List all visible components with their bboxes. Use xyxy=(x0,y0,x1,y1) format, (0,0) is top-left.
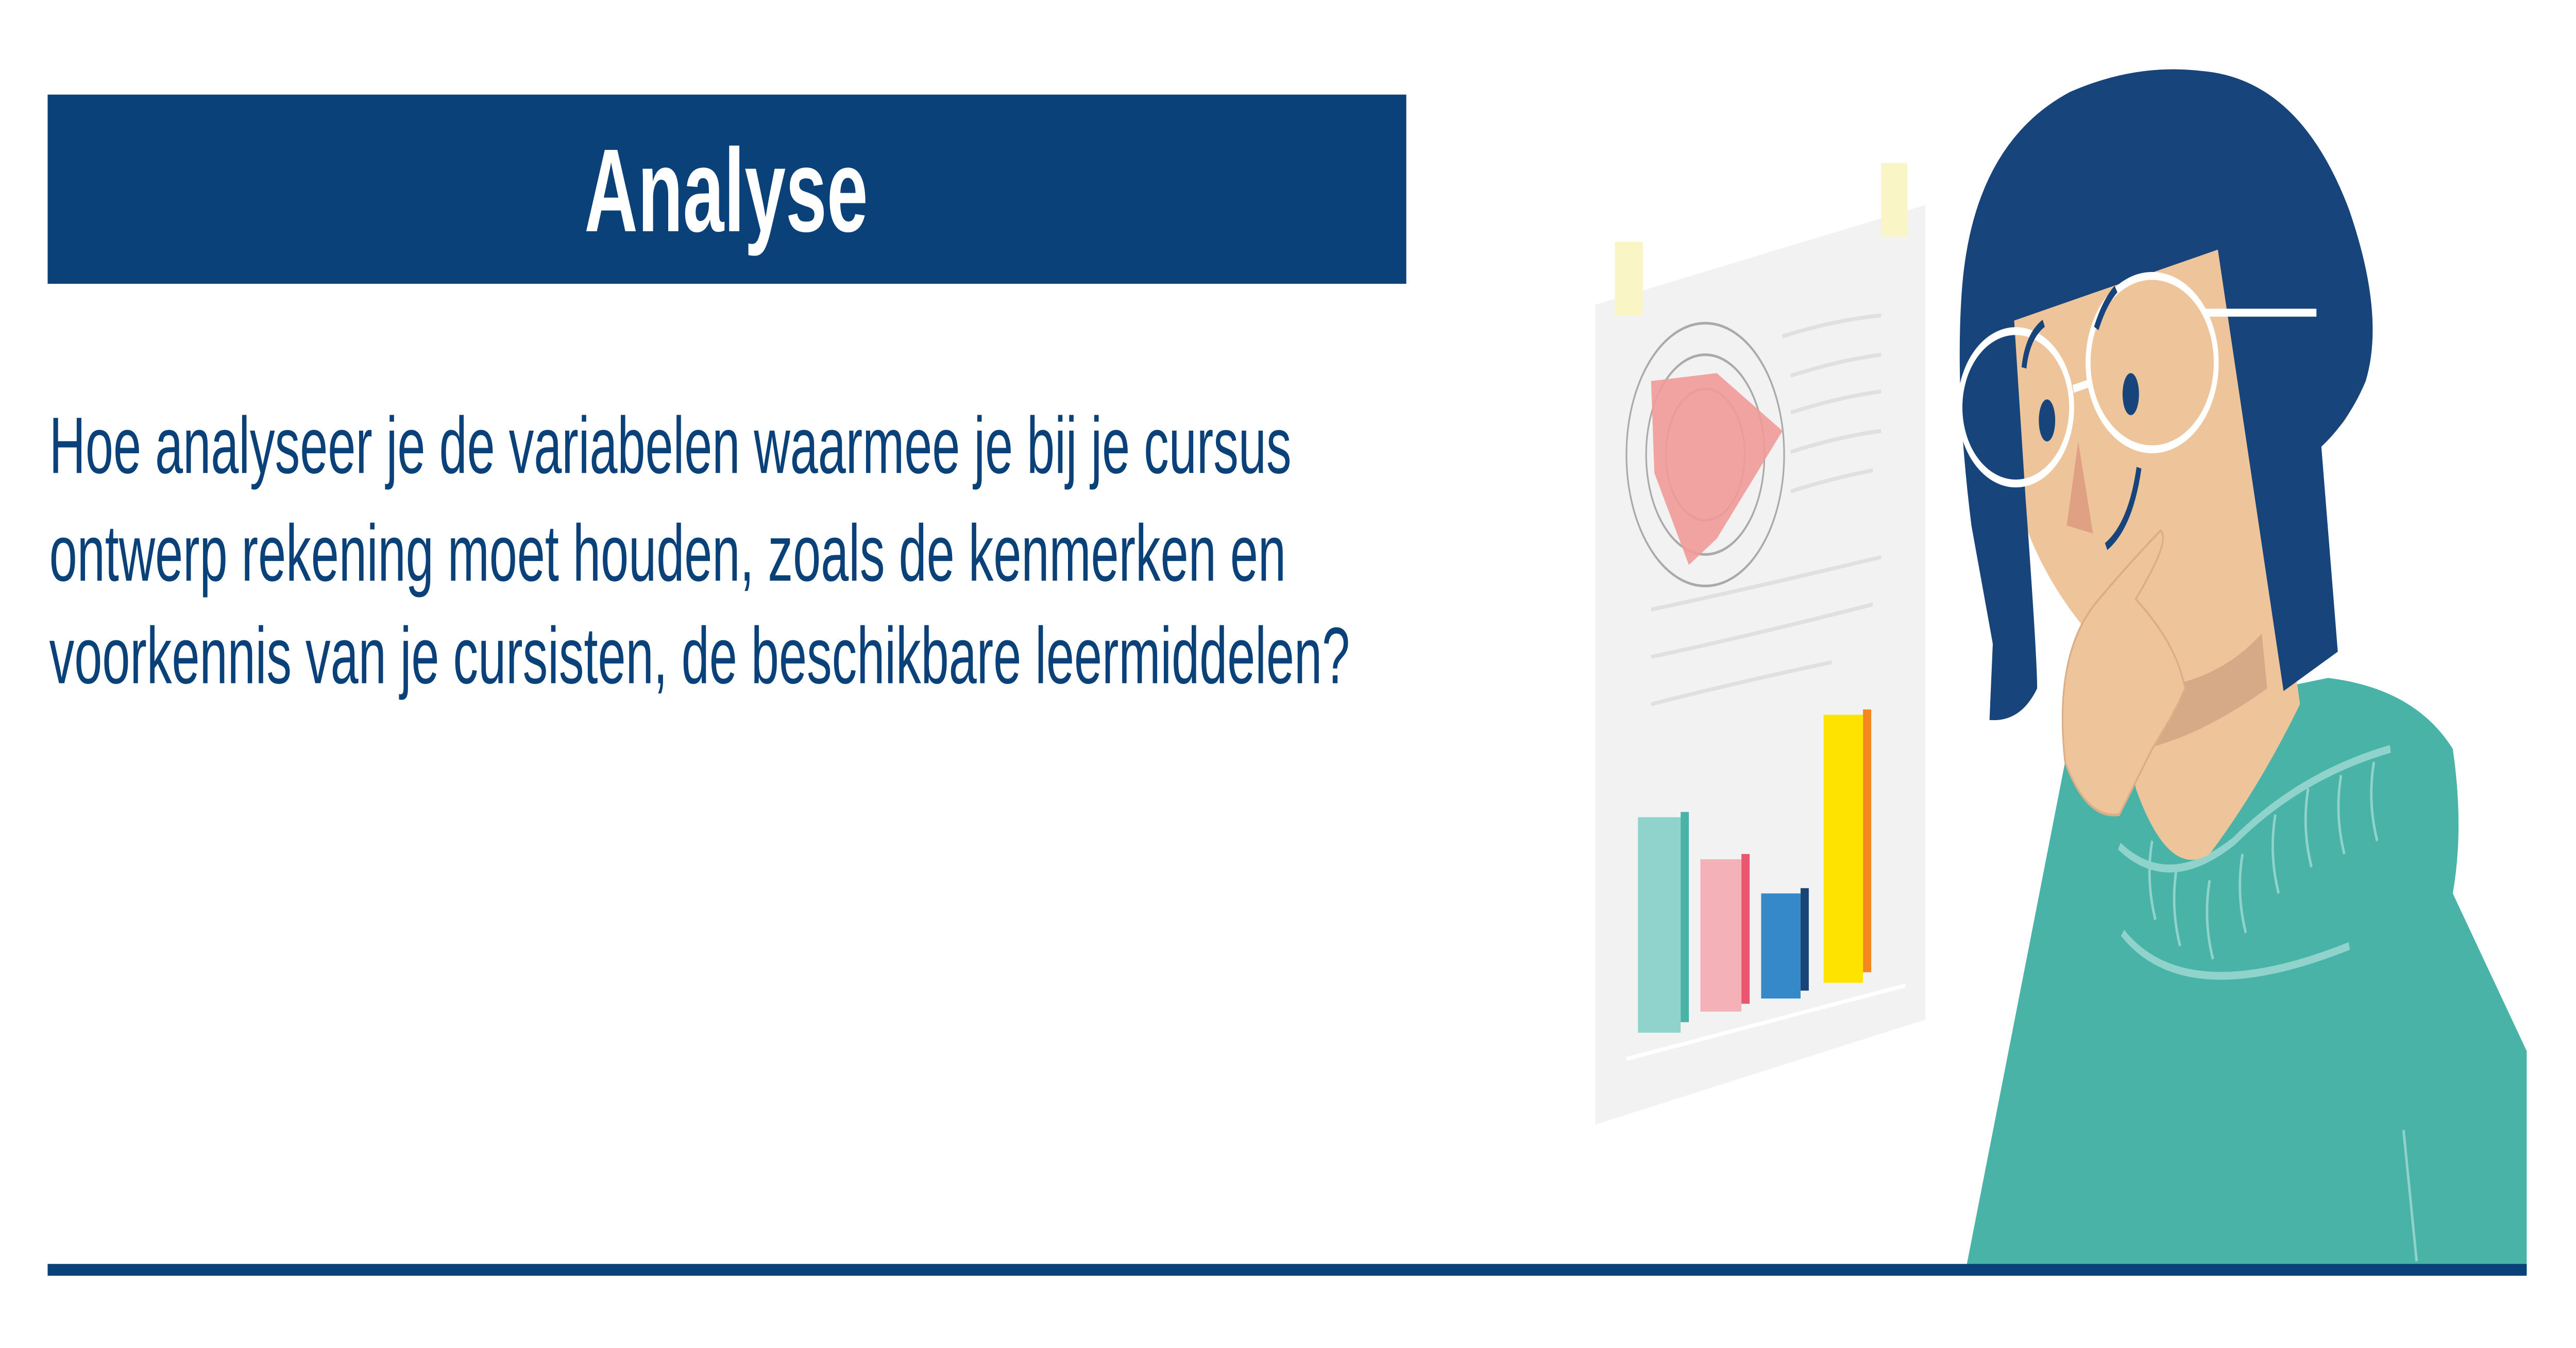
title xyxy=(47,95,1406,284)
text block: voorkennis van je cursisten, de beschikbare leermiddelen? xyxy=(49,611,1350,701)
text block: ontwerp rekening moet houden, zoals de kenmerken en xyxy=(49,509,1286,598)
eyes, nose, mouth xyxy=(2039,399,2055,441)
glasses xyxy=(1960,331,2072,484)
sweater xyxy=(1965,678,2527,1274)
text block xyxy=(49,401,1350,701)
illustration: person xyxy=(1960,69,2527,1274)
text block: Hoe analyseer je de variabelen waarmee je bij je cursus xyxy=(49,401,1292,490)
illustration: chart paper xyxy=(1595,163,1925,1124)
neck & face xyxy=(2120,525,2300,860)
hand xyxy=(2062,531,2185,815)
title: Analyse xyxy=(584,124,868,257)
bottom rule xyxy=(47,1264,2527,1276)
hair xyxy=(1960,69,2372,720)
